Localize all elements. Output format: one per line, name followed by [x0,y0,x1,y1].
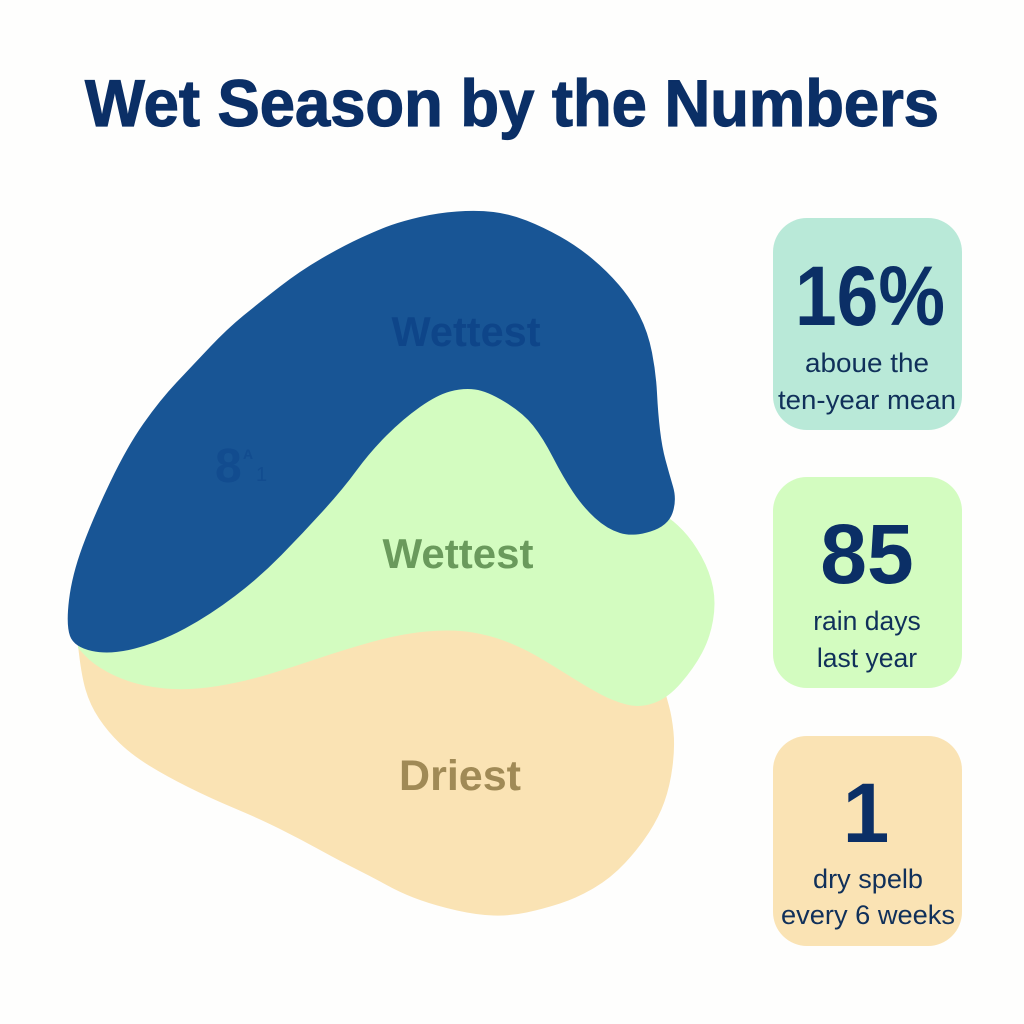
stat card: 16%: ten-year mean [778,385,956,415]
label: obscured number: A [243,446,253,462]
stat caption: aboue the [805,348,929,378]
label: wettest top: Wettest [391,308,541,355]
blob: driest [78,600,674,916]
label: obscured number: 8 [215,440,242,493]
stat value: 16% [795,249,945,343]
stat card: 85 [773,477,962,688]
stat value: 1 [843,766,889,860]
stat card: 16% [773,218,962,430]
label: obscured number [215,440,267,493]
blob: wet middle [78,350,714,706]
stat caption: rain days [813,606,921,636]
label: obscured number: 1 [256,464,267,486]
stat card: 1 [773,736,962,946]
label: driest: Driest [399,752,521,800]
label: wettest middle: Wettest [383,530,533,577]
blob chart [68,211,714,916]
blob: wettest top [68,211,675,653]
stat card: 85: last year [817,643,917,673]
title: Wet Season by the Numbers [85,66,939,140]
stat card: 1: every 6 weeks [781,900,955,930]
stat caption: dry spelb [813,864,923,894]
stat value: 85 [820,507,914,601]
